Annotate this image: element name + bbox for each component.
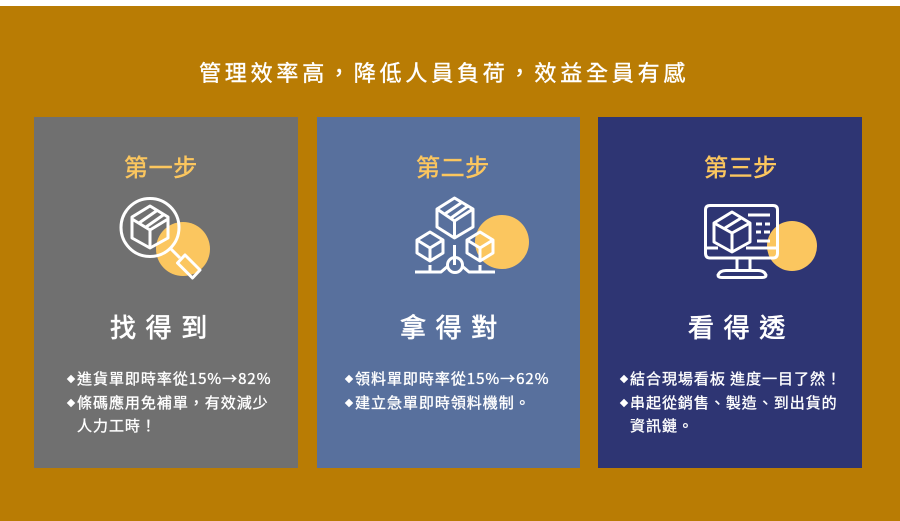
heading: step two label: 第二步: [416, 148, 490, 183]
icon: three boxes network: [415, 198, 529, 272]
heading: get: 拿得對: [400, 308, 507, 345]
text block: step one bullets: 進貨單即時率從15%→82%: [77, 368, 272, 389]
heading: step three label: 第三步: [704, 148, 778, 183]
panel: step three: [598, 117, 862, 468]
panel: step one: [34, 117, 298, 468]
text block: step one bullets: 人力工時！: [77, 415, 157, 436]
text block: step one bullets: [66, 368, 272, 436]
heading: find: 找得到: [110, 308, 217, 345]
text block: step three bullets: [620, 368, 842, 436]
heading: step one label: 第一步: [124, 148, 198, 183]
icon: magnifier over box: [121, 198, 210, 278]
text block: step two bullets: 建立急單即時領料機制。: [355, 392, 531, 413]
text block: step three bullets: 資訊鏈。: [630, 415, 694, 436]
icon: monitor with box: [706, 206, 817, 278]
panel: step two: [316, 117, 580, 468]
text block: step two bullets: [344, 368, 550, 413]
text block: step one bullets: 條碼應用免補單，有效減少: [77, 392, 269, 413]
text block: step three bullets: 串起從銷售、製造、到出貨的: [630, 392, 838, 413]
title: 管理效率高，降低人員負荷，效益全員有感: [199, 56, 689, 88]
heading: see: 看得透: [688, 308, 795, 345]
text block: step two bullets: 領料單即時率從15%→62%: [355, 368, 550, 389]
text block: step three bullets: 結合現場看板 進度一目了然！: [630, 368, 842, 389]
